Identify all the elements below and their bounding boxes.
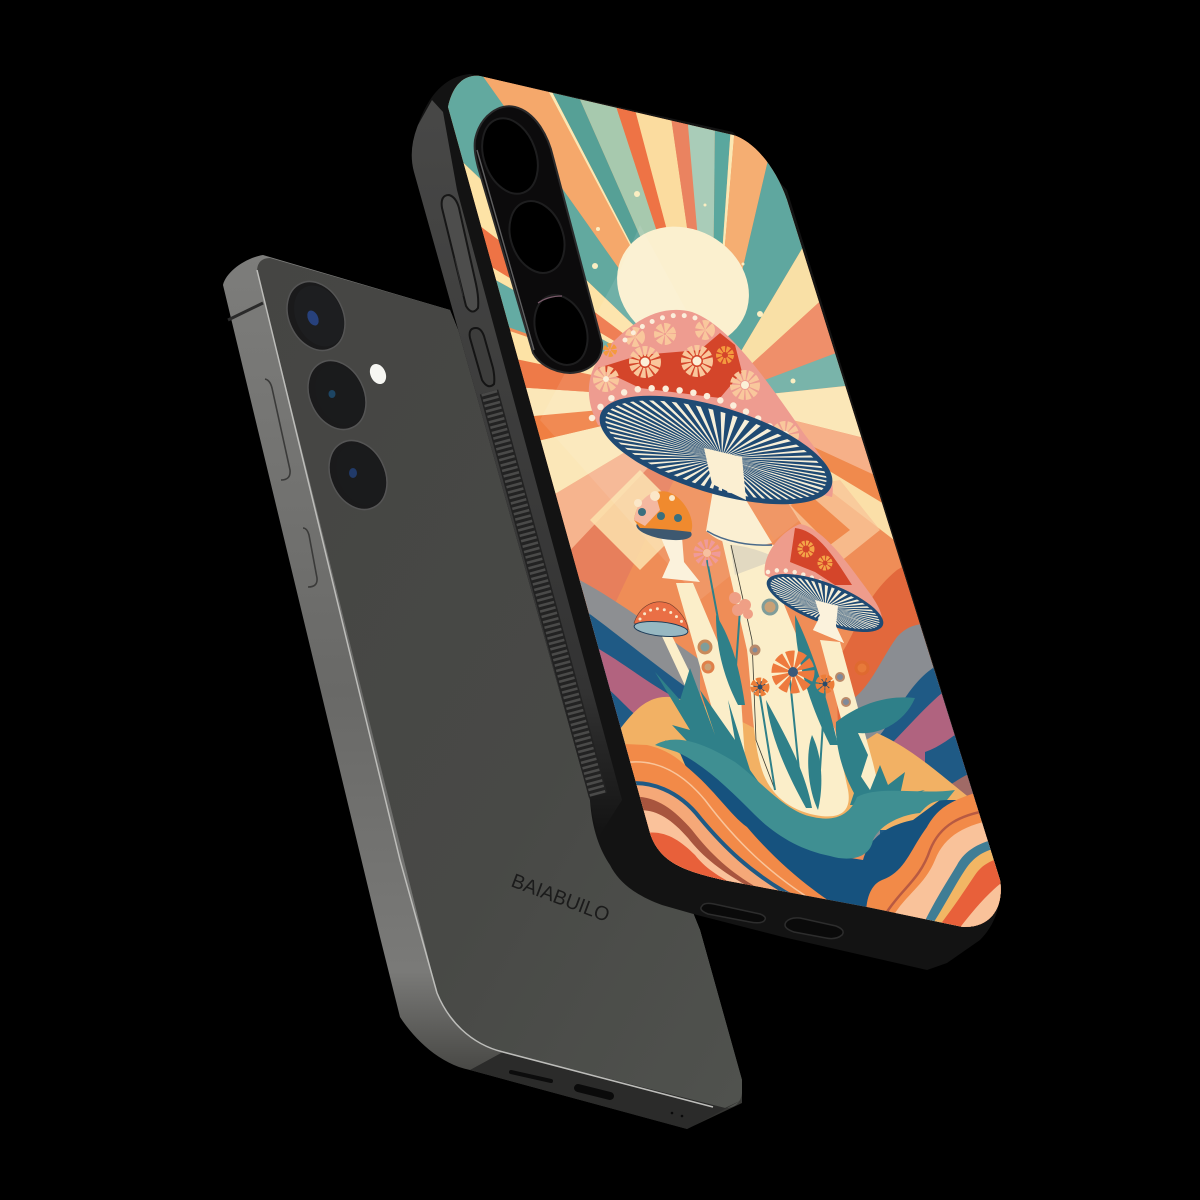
sun [617,226,749,336]
cap dots [588,385,773,426]
navy river [680,754,989,921]
brand logo: BAIABUILO [508,870,612,927]
right mushroom cap [760,524,890,644]
camera rim highlight [477,150,534,350]
scene: two phones on black [223,74,1001,1129]
right mushroom stem [813,628,876,790]
case side band [412,100,622,836]
wildflowers [698,544,868,790]
lower ray crossing [590,470,880,570]
artwork base [448,76,1001,927]
ribbed grip [489,392,598,795]
grey phone [223,255,742,1129]
side buttons [265,379,317,587]
teal ground [655,740,955,859]
large mushroom stem [706,494,849,816]
volume button [442,195,478,312]
phone body frame [223,255,742,1129]
glass reflection [540,225,800,600]
flash [367,361,389,387]
stars [592,191,796,384]
camera cutout [472,106,602,373]
upper-left small mushroom [634,491,745,760]
artwork panel [448,76,1001,927]
frame antenna split [228,303,263,320]
right wavy stripes [866,794,1001,927]
back plate [257,258,742,1108]
plants and foliage [655,615,925,810]
cap red band [598,333,742,398]
large mushroom gills [600,396,832,504]
case body [412,74,1000,970]
camera lenses [276,272,398,519]
frame highlight line [257,270,713,1107]
charging ports [701,903,843,939]
gill lines [648,413,796,503]
large mushroom cap [589,310,833,497]
mound [612,697,985,830]
power button [470,328,494,386]
lens openings [472,110,597,372]
cap flowers [598,325,794,444]
hills back left [570,575,700,770]
hills back right [837,567,994,860]
sunburst rays [440,65,907,660]
mushroom phone case [412,60,1020,970]
lower-left small mushroom [634,602,689,686]
left rainbow stripes [625,744,828,900]
bottom edge with ports [470,1052,742,1129]
